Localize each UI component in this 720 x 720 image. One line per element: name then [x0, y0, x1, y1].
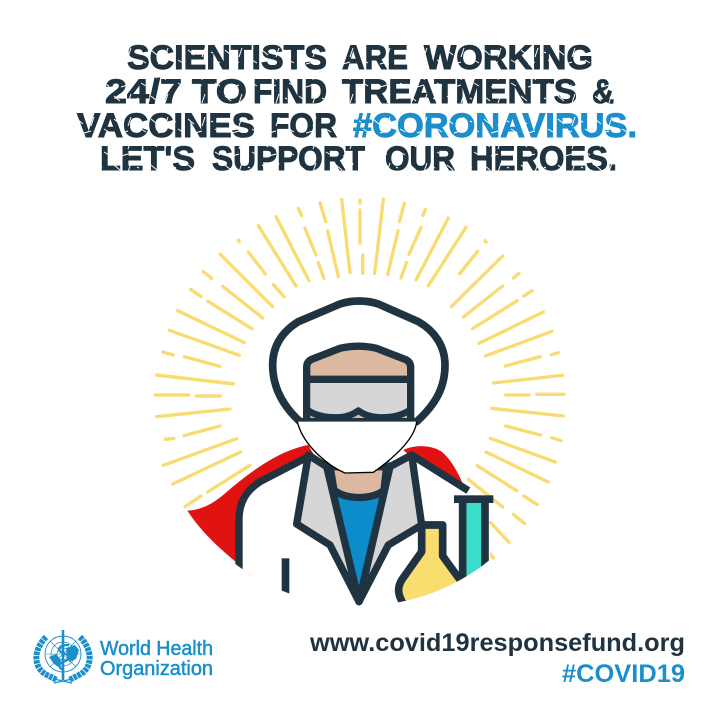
hashtag: #COVID19 [562, 660, 685, 688]
title [77, 39, 637, 178]
title: TREATMENTS [342, 73, 577, 111]
title: ARE [342, 39, 408, 77]
title: FOR [270, 107, 337, 145]
title: TO [192, 73, 247, 111]
WHO wordmark: Organization [100, 657, 213, 680]
continents [49, 645, 79, 668]
title: FIND [253, 73, 327, 111]
title: SUPPORT [212, 140, 365, 178]
title: VACCINES [77, 107, 255, 145]
shirt and neck [327, 460, 390, 588]
scientist figure [187, 301, 493, 613]
title: & [592, 73, 614, 111]
staff and serpent [62, 630, 64, 680]
title: OUR [385, 140, 455, 178]
laurel wreath [36, 637, 90, 680]
WHO emblem [36, 630, 90, 683]
title: 24/7 [105, 73, 182, 111]
title: WORKING [424, 39, 593, 77]
sun rays [155, 199, 564, 558]
goggles [307, 379, 411, 417]
lapels [297, 455, 422, 602]
WHO wordmark: World Health [100, 637, 213, 660]
website url: www.covid19responsefund.org [309, 630, 685, 657]
title: SCIENTISTS [127, 39, 327, 77]
flask [399, 525, 465, 613]
lab coat [242, 462, 490, 576]
coat pocket mark [282, 558, 289, 598]
face [307, 346, 411, 422]
title: #CORONAVIRUS. [353, 107, 637, 145]
title: LET'S [100, 140, 195, 178]
WHO wordmark [100, 637, 213, 680]
face mask [297, 422, 417, 473]
hood [273, 301, 445, 422]
test tube [454, 495, 494, 581]
cape [187, 445, 463, 580]
title: HEROES. [470, 140, 617, 178]
